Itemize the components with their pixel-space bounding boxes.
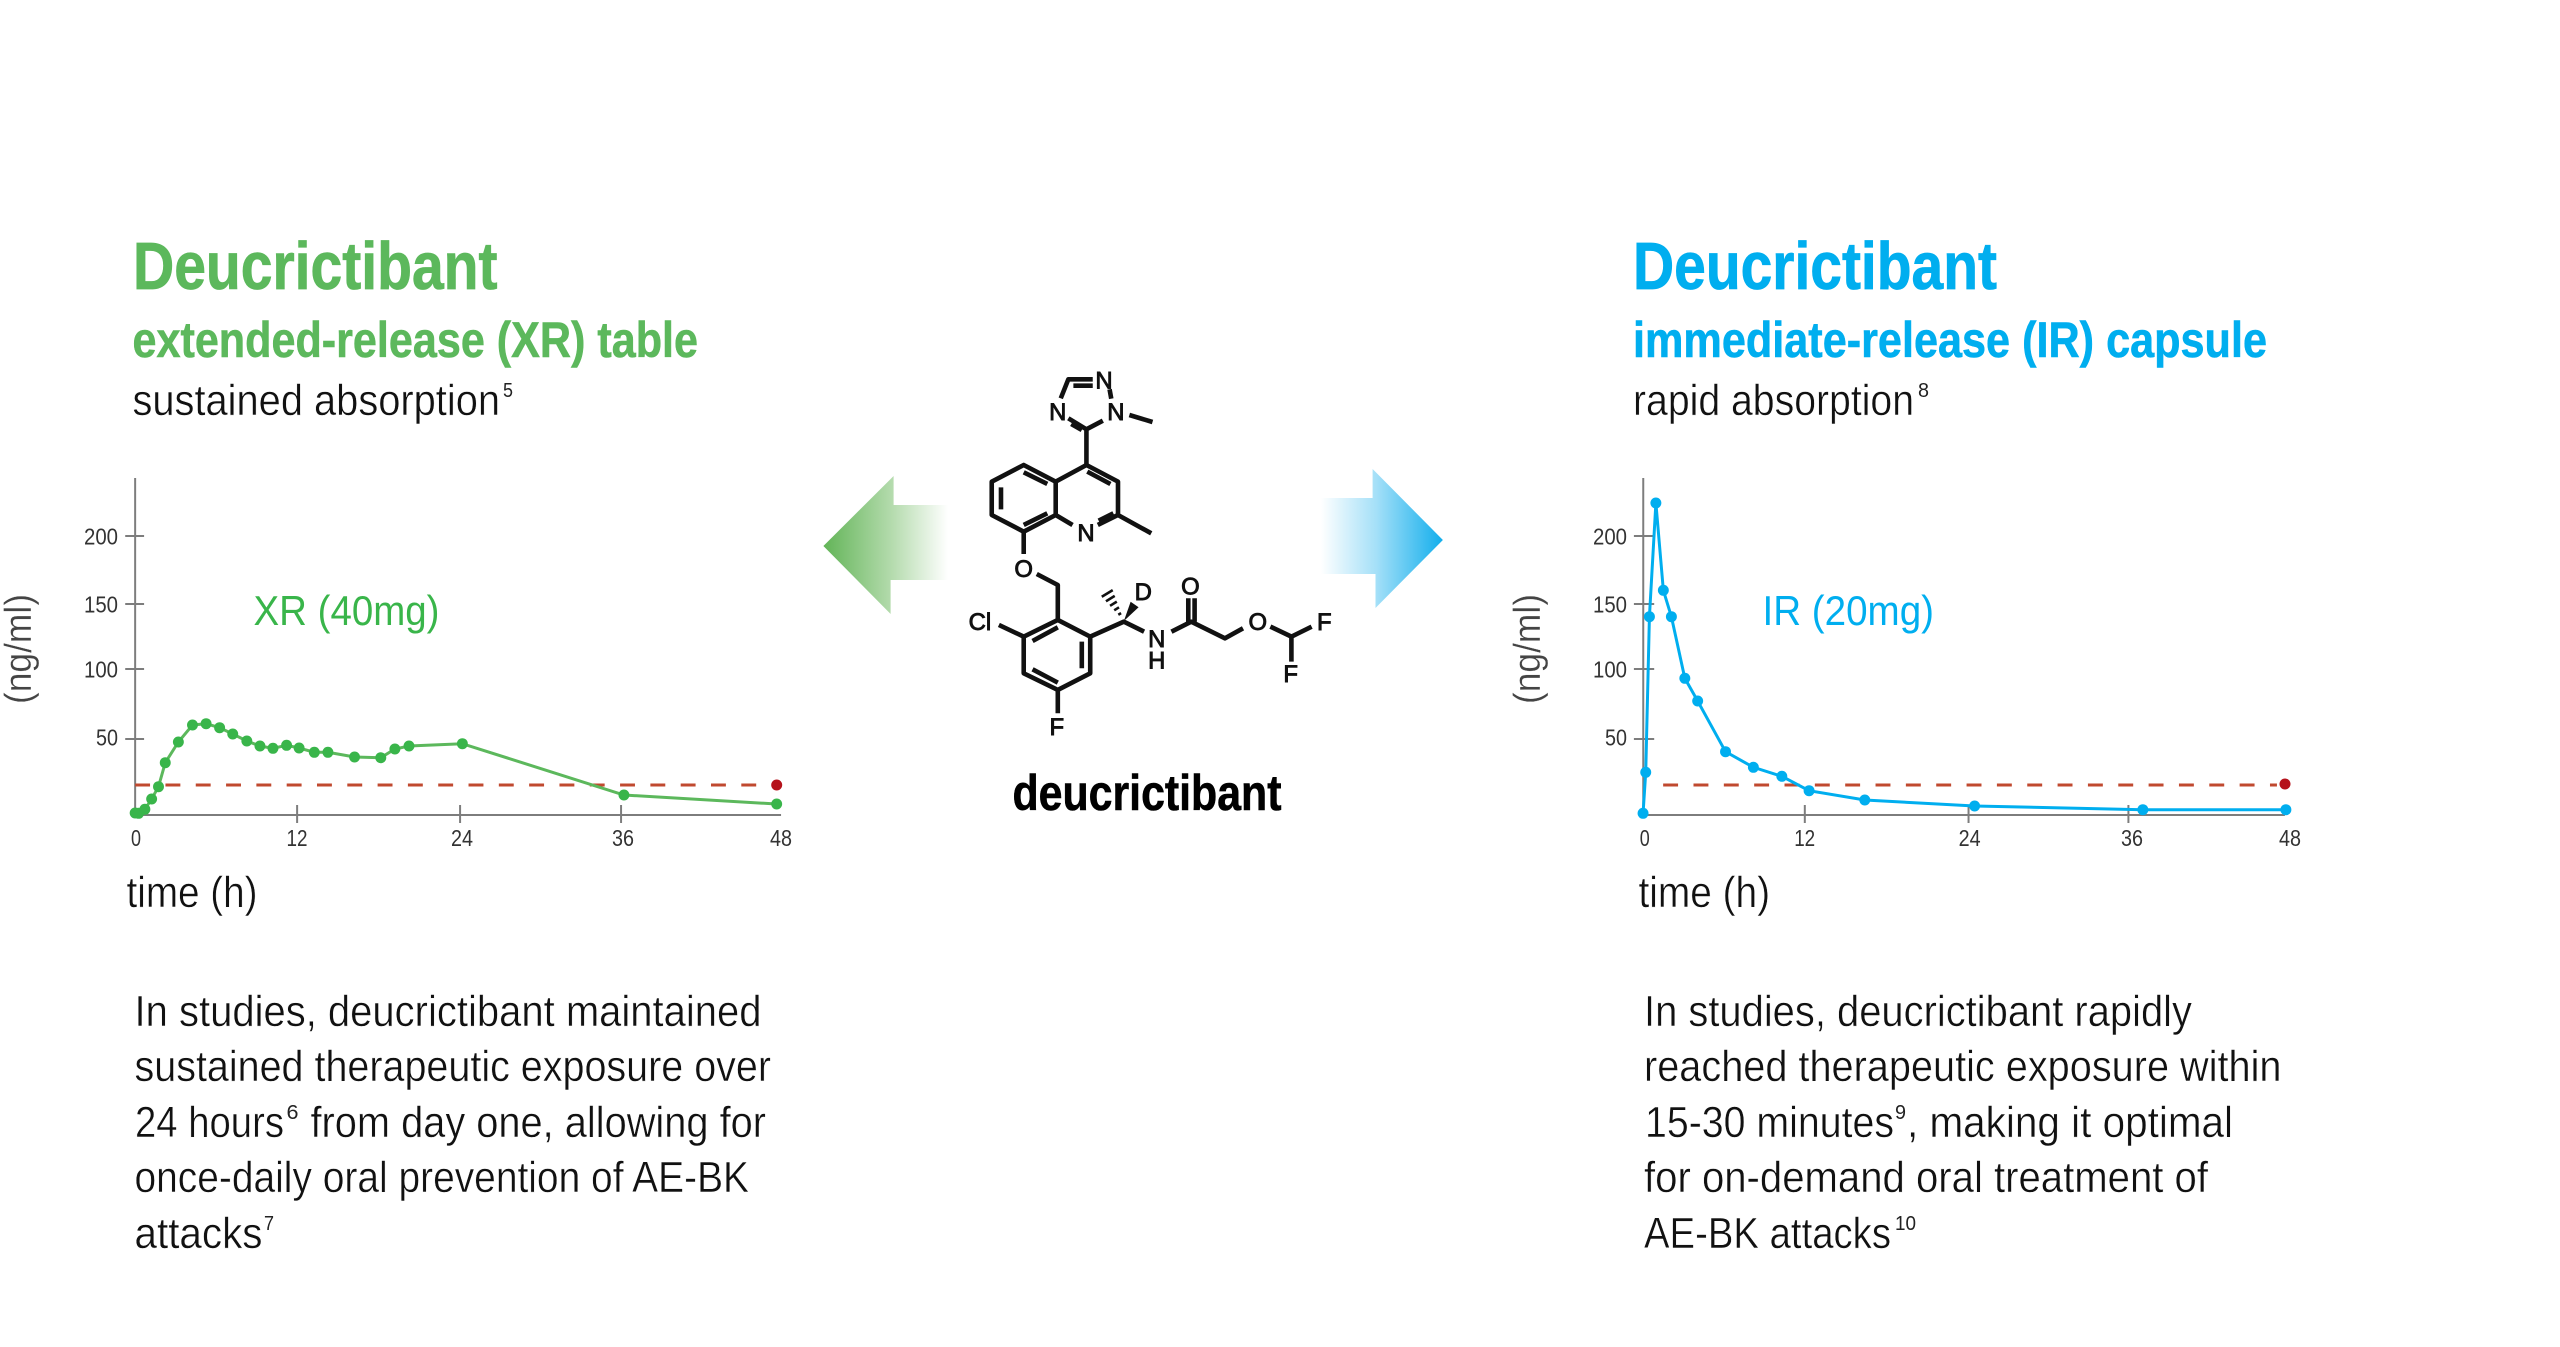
threshold marker XR [771,780,782,790]
panel: IR heading [1633,229,2267,425]
y-axis tick labels XR [84,524,118,750]
text block: XR description: sustained therapeutic exposure over [134,1042,771,1091]
caption: deucrictibant: deucrictibant [1012,765,1282,821]
text block: XR description: from day one, allowing for [310,1098,766,1147]
series label IR: IR (20mg) [1762,587,1934,634]
text block: XR description: 6 [286,1102,298,1124]
subtitle: extended-release: extended-release (XR) table [132,312,698,368]
threshold marker IR [2280,778,2290,790]
atom labels: Cl [969,609,991,636]
atom labels: N [1095,367,1113,395]
x-axis tick labels IR: 0 [1640,825,1650,851]
atom labels: F [1050,714,1064,741]
x-axis tick labels XR: 24 [451,825,473,851]
text block: XR description: 7 [264,1213,274,1235]
icon: deucrictibant molecular structure [969,367,1332,741]
chart: IR 20mg concentration over time [1507,478,2301,917]
atom labels: H [1148,647,1165,675]
atom labels: N [1077,520,1095,547]
threshold dashed line IR [1663,784,2277,786]
y-axis tick labels IR [1593,524,1627,750]
superscript 8: 8 [1918,380,1929,402]
text block: XR description [134,987,771,1258]
data points XR [130,718,782,819]
x-axis tick labels XR: 0 [131,825,141,851]
text block: IR description: 15-30 minutes [1645,1098,1894,1147]
chart axes IR [1634,478,2285,823]
x-axis tick labels IR [1640,825,2301,851]
molecule bonds [992,379,1312,713]
x-axis tick labels IR: 12 [1794,825,1815,851]
atom labels: O [1249,609,1267,636]
arrow: blue pointing right [1321,469,1443,608]
text block: IR description: 10 [1895,1213,1916,1235]
text block: XR description: attacks [134,1209,262,1258]
atom labels [969,367,1332,741]
stereo hash [1102,590,1121,615]
x-axis tick labels IR: 36 [2121,825,2143,851]
atom labels: F [1317,609,1332,636]
y-axis tick labels XR: 50 [96,724,118,750]
text: sustained absorption: sustained absorption [132,376,500,425]
y-axis tick labels XR: 150 [84,592,118,618]
x-axis tick labels IR: 48 [2279,825,2301,851]
superscript 5: 5 [503,380,513,402]
x-axis title XR: time (h) [126,868,258,917]
x-axis tick labels XR: 12 [286,825,308,851]
x-axis tick labels XR: 48 [770,825,792,851]
atom labels: N [1148,626,1165,653]
x-axis tick labels IR: 24 [1959,825,1981,851]
atom labels: N [1049,399,1066,426]
text block: XR description: once-daily oral prevention of AE-BK [134,1153,749,1202]
data line XR [135,724,777,813]
atom labels: O [1014,556,1033,583]
atom labels: N [1107,399,1125,426]
chart: XR 40mg concentration over time [0,478,792,917]
y-axis unit IR: (ng/ml) [1507,594,1549,704]
title: Deucrictibant IR: Deucrictibant [1633,229,1997,304]
y-axis tick labels IR: 100 [1593,656,1627,682]
text block: XR description: 24 hours [135,1098,284,1147]
x-axis title IR: time (h) [1638,868,1770,917]
y-axis tick labels IR: 150 [1593,592,1627,618]
chart axes XR [125,478,781,823]
text block: IR description: AE-BK attacks [1644,1209,1891,1258]
threshold dashed line XR [135,784,770,786]
arrow: green pointing left [823,476,948,614]
text block: XR description: In studies, deucrictibant maintained [134,987,762,1036]
text block: IR description: reached therapeutic exposure within [1644,1042,2282,1091]
y-axis tick labels IR: 200 [1593,524,1627,550]
panel: XR heading [132,229,698,425]
text block: IR description: 9 [1895,1102,1906,1124]
x-axis tick labels XR: 36 [612,825,634,851]
data points IR [1638,498,2291,819]
data line IR [1643,503,2286,813]
text block: IR description [1644,987,2282,1258]
y-axis tick labels IR: 50 [1605,724,1627,750]
series label XR: XR (40mg) [254,587,440,634]
stereo wedge [1124,602,1139,621]
text block: IR description: In studies, deucrictibant rapidly [1644,987,2192,1036]
atom labels: D [1135,579,1152,606]
x-axis tick labels XR [131,825,792,851]
atom labels: O [1181,573,1200,601]
atom labels: F [1283,661,1298,688]
text block: IR description: for on-demand oral treatment of [1644,1153,2209,1202]
y-axis tick labels XR: 200 [84,524,118,550]
text: rapid absorption: rapid absorption [1633,376,1914,425]
title: Deucrictibant XR: Deucrictibant [133,229,498,304]
text block: IR description: , making it optimal [1907,1098,2233,1147]
y-axis tick labels XR: 100 [84,656,118,682]
subtitle: immediate-release: immediate-release (IR) capsule [1633,312,2267,368]
